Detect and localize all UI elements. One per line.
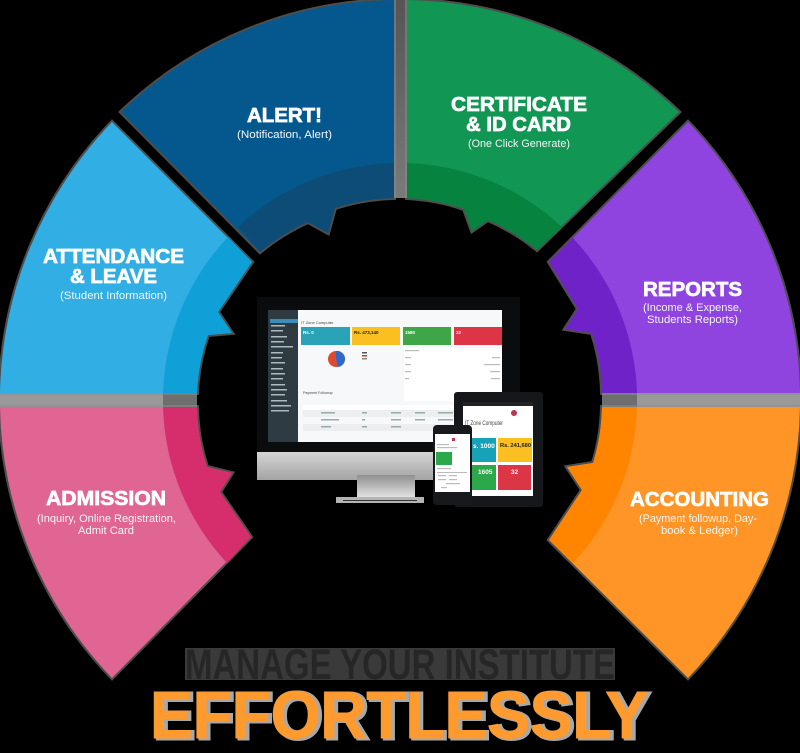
stat cards on monitor: 1580: [405, 330, 416, 335]
heading: alert: ALERT!: [247, 105, 322, 127]
text: admission description: [37, 513, 176, 537]
panel: alert: [121, 0, 394, 252]
panel: accounting: [549, 407, 800, 678]
monitor stand: [336, 475, 424, 503]
heading: admission: ADMISSION: [46, 488, 166, 510]
heading: accounting: ACCOUNTING: [630, 489, 769, 511]
text: reports description: Students Reports): [647, 314, 738, 326]
icon: desktop monitor: IT Zone Computer: [301, 320, 334, 325]
stat cards on monitor: 32: [456, 330, 462, 335]
tablet stat cards: Rs. 241,680: [500, 443, 531, 449]
heading: leave: & LEAVE: [70, 266, 157, 288]
text: reports description: [643, 302, 742, 326]
panel: certificate and id card: [407, 0, 679, 250]
text: admission description: Admit Card: [78, 525, 134, 537]
heading: certificate: CERTIFICATE: [451, 94, 587, 116]
heading: id card: & ID CARD: [466, 114, 571, 136]
icon: tablet: [454, 392, 543, 507]
heading: tagline line one: MANAGE YOUR INSTITUTE: [185, 641, 615, 689]
text: alert description: (Notification, Alert): [237, 129, 332, 141]
heading: reports: REPORTS: [643, 279, 742, 301]
stat cards on monitor: Rs. 0: [303, 330, 314, 335]
panel: reports: [549, 122, 800, 393]
icon: phone: [433, 425, 472, 505]
text: reports description: (Income & Expense,: [643, 302, 742, 314]
panel: attendance and leave: [0, 122, 252, 393]
panel: admission: [0, 407, 251, 678]
table on monitor: [303, 405, 502, 431]
text: admission description: (Inquiry, Online Registration,: [37, 513, 176, 525]
pie chart on monitor: [328, 351, 367, 367]
tablet stat cards: 1605: [478, 469, 493, 476]
monitor chin: [257, 452, 433, 480]
text: accounting description: [639, 513, 757, 537]
text: accounting description: (Payment followup, Day-: [639, 513, 757, 525]
text: attendance description: (Student Information): [60, 290, 167, 302]
tablet stat cards: 32: [511, 469, 519, 476]
icon: desktop monitor: Payment Followup: [303, 391, 333, 395]
tablet stat cards: s. 1000: [473, 443, 495, 450]
heading: effortlessly: EFFORTLESSLY: [150, 678, 648, 753]
stat cards on monitor: Rs. 473,140: [354, 330, 379, 335]
heading: attendance: ATTENDANCE: [43, 246, 184, 268]
tablet stat cards: [472, 438, 532, 490]
text: accounting description: book & Ledger): [661, 525, 738, 537]
icon: tablet: IT Zone Computer: [465, 421, 503, 427]
text: certificate description: (One Click Generate): [468, 138, 570, 150]
icon: desktop monitor: [257, 297, 520, 503]
heading: effortlessly: EFFORTLESSLY: [153, 679, 651, 753]
stat cards on monitor: [301, 327, 502, 345]
